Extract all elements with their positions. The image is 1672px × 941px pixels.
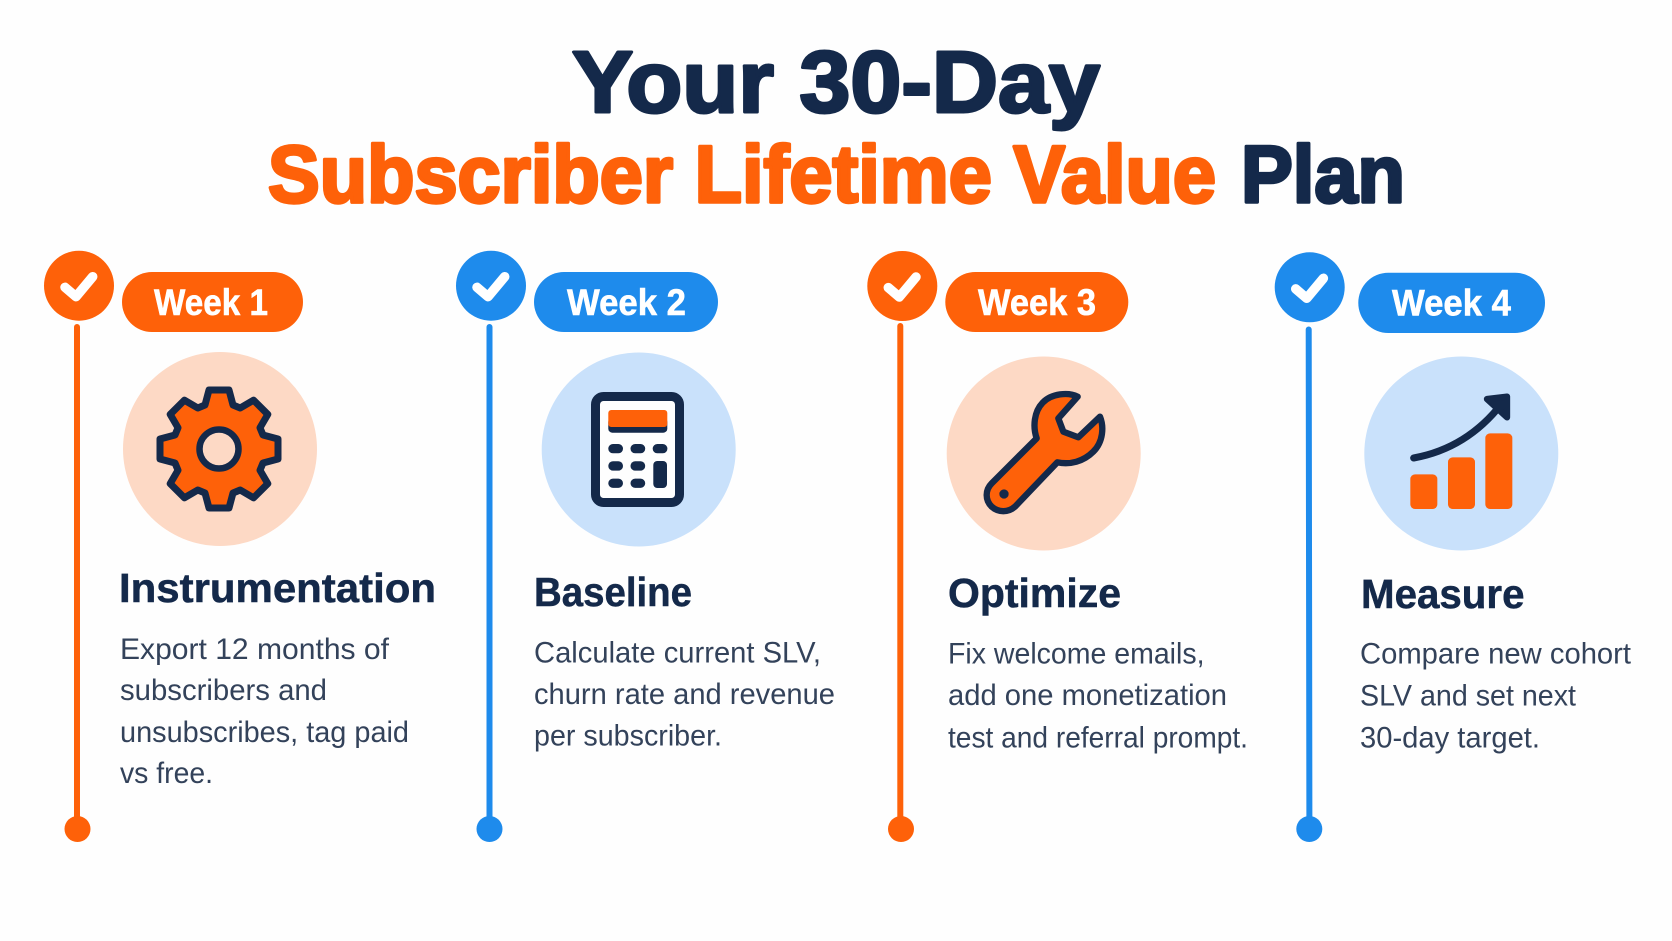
description week 2: Calculate current SLV, <box>534 636 821 670</box>
week 3 pill: Week 3 <box>978 282 1096 323</box>
week 4 pill: Week 4 <box>1392 282 1511 324</box>
timeline line week 1 <box>74 324 80 829</box>
icon: check badge week 3 <box>867 251 937 321</box>
description week 2: per subscriber. <box>534 720 722 752</box>
description week 4: SLV and set next <box>1360 680 1576 712</box>
week 3 pill <box>945 272 1128 332</box>
icon: gear <box>123 352 317 546</box>
timeline line week 3 <box>897 323 903 829</box>
description week 3 <box>948 638 1248 754</box>
icon: check badge week 1 <box>44 251 114 321</box>
heading: measure: Measure <box>1361 571 1524 617</box>
description week 3: Fix welcome emails, <box>948 638 1204 670</box>
panel: week 1 instrumentation <box>44 251 436 842</box>
heading: baseline: Baseline <box>534 569 692 615</box>
description week 1 <box>120 633 409 790</box>
icon: growth chart <box>1364 356 1558 550</box>
timeline line week 2 <box>486 324 492 829</box>
description week 4: 30-day target. <box>1360 722 1540 754</box>
title line 2 end: Plan <box>1241 130 1405 220</box>
description week 2 <box>534 636 835 752</box>
icon: calculator <box>542 352 736 546</box>
panel: week 4 measure <box>1275 252 1631 842</box>
week 4 pill <box>1358 273 1545 333</box>
heading: optimize: Optimize <box>948 570 1121 616</box>
description week 1: vs free. <box>120 757 213 790</box>
week 1 pill: Week 1 <box>154 282 268 323</box>
panel: week 3 optimize <box>867 251 1248 842</box>
icon: check badge week 2 <box>456 251 526 321</box>
icon: wrench <box>947 356 1141 550</box>
description week 4 <box>1360 638 1631 754</box>
timeline end dot week 1 <box>64 816 90 842</box>
description week 2: churn rate and revenue <box>534 678 835 711</box>
title highlighted phrase: Subscriber Lifetime Value <box>268 130 1216 220</box>
icon: check badge week 4 <box>1275 252 1345 322</box>
heading: instrumentation: Instrumentation <box>119 565 436 611</box>
title line 1: Your 30-Day <box>572 34 1100 131</box>
timeline end dot week 3 <box>888 816 914 842</box>
week 2 pill: Week 2 <box>567 282 686 323</box>
panel: week 2 baseline <box>456 251 835 842</box>
description week 3: test and referral prompt. <box>948 722 1248 754</box>
description week 3: add one monetization <box>948 679 1227 712</box>
week 1 pill <box>122 272 303 332</box>
title <box>268 34 1405 220</box>
description week 4: Compare new cohort <box>1360 638 1631 670</box>
timeline line week 4 <box>1306 330 1312 829</box>
timeline end dot week 2 <box>476 816 502 842</box>
description week 1: subscribers and <box>120 674 327 707</box>
description week 1: unsubscribes, tag paid <box>120 716 409 749</box>
timeline end dot week 4 <box>1296 816 1322 842</box>
week 2 pill <box>534 272 718 332</box>
description week 1: Export 12 months of <box>120 633 390 666</box>
